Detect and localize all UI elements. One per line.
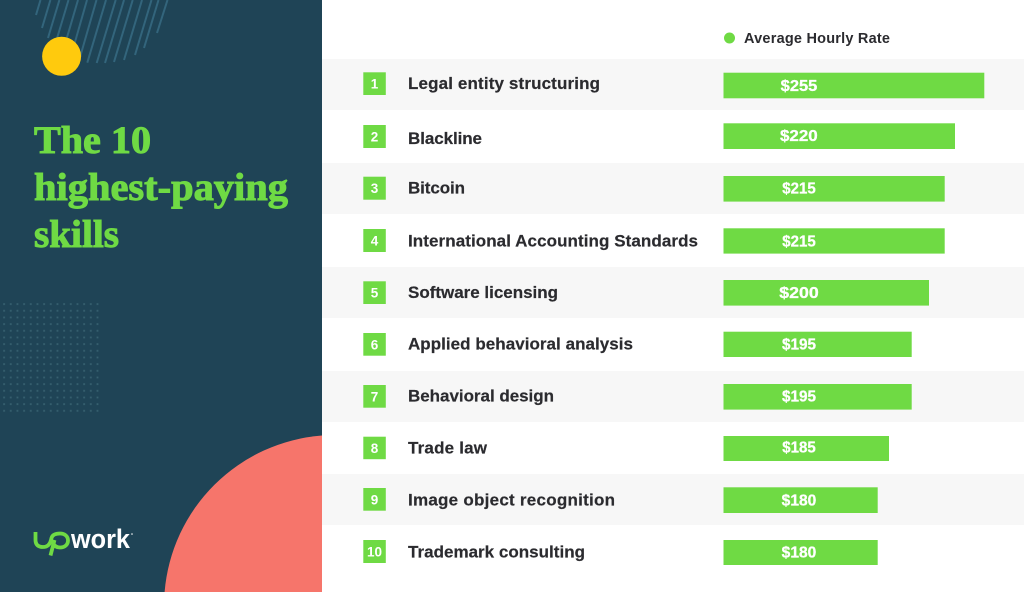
- row 8: Trade law: [408, 438, 488, 458]
- row 2: 2: [371, 129, 378, 144]
- row 8: 8: [371, 441, 379, 456]
- row 4: 4: [371, 233, 379, 248]
- title: skills: [34, 213, 119, 256]
- panel: sidebar: [0, 0, 322, 592]
- row 7: Behavioral design: [408, 386, 554, 406]
- row 7: 7: [371, 389, 378, 404]
- row 2: [363, 123, 955, 149]
- row 1: $255: [781, 78, 818, 95]
- row 7: $195: [782, 389, 816, 406]
- row 5: [322, 267, 1024, 318]
- upwork logo: [36, 524, 133, 556]
- dot grid: [3, 303, 100, 413]
- row 4: $215: [782, 234, 816, 251]
- row 10: [363, 540, 878, 565]
- row 3: $215: [782, 180, 816, 198]
- row 5: Software licensing: [408, 283, 558, 302]
- row 6: [363, 332, 912, 357]
- row 10: 10: [367, 544, 382, 560]
- row 3: Bitcoin: [408, 178, 465, 198]
- row 9: $180: [782, 492, 816, 509]
- row 1: Legal entity structuring: [408, 74, 600, 93]
- row 7: [322, 371, 1024, 422]
- row 5: $200: [779, 285, 819, 302]
- row 1: [322, 59, 1024, 110]
- row 9: [322, 474, 1024, 525]
- row 8: [363, 436, 889, 461]
- decorative striped circle: [36, 0, 168, 63]
- title: highest-paying: [34, 166, 289, 209]
- row 1: 1: [371, 76, 379, 92]
- row 3: 3: [371, 181, 379, 196]
- salmon circle: [165, 436, 322, 592]
- row 9: Image object recognition: [408, 490, 615, 510]
- row 4: International Accounting Standards: [408, 232, 698, 250]
- row 10: Trademark consulting: [408, 542, 585, 562]
- row 6: $195: [782, 336, 816, 353]
- row 6: 6: [371, 337, 379, 352]
- row 6: Applied behavioral analysis: [408, 334, 633, 354]
- row 4: [363, 228, 945, 254]
- title: The 10: [34, 119, 151, 162]
- row 10: $180: [782, 545, 816, 562]
- row 3: [322, 163, 1024, 214]
- legend: Average Hourly Rate: [744, 31, 890, 47]
- row 5: 5: [371, 286, 379, 300]
- row 9: 9: [371, 492, 378, 507]
- upwork logo: work: [70, 524, 131, 554]
- row 2: $220: [780, 128, 818, 145]
- title: [34, 119, 289, 256]
- yellow circle: [42, 37, 81, 76]
- row 8: $185: [782, 440, 816, 457]
- row 2: Blackline: [408, 129, 482, 148]
